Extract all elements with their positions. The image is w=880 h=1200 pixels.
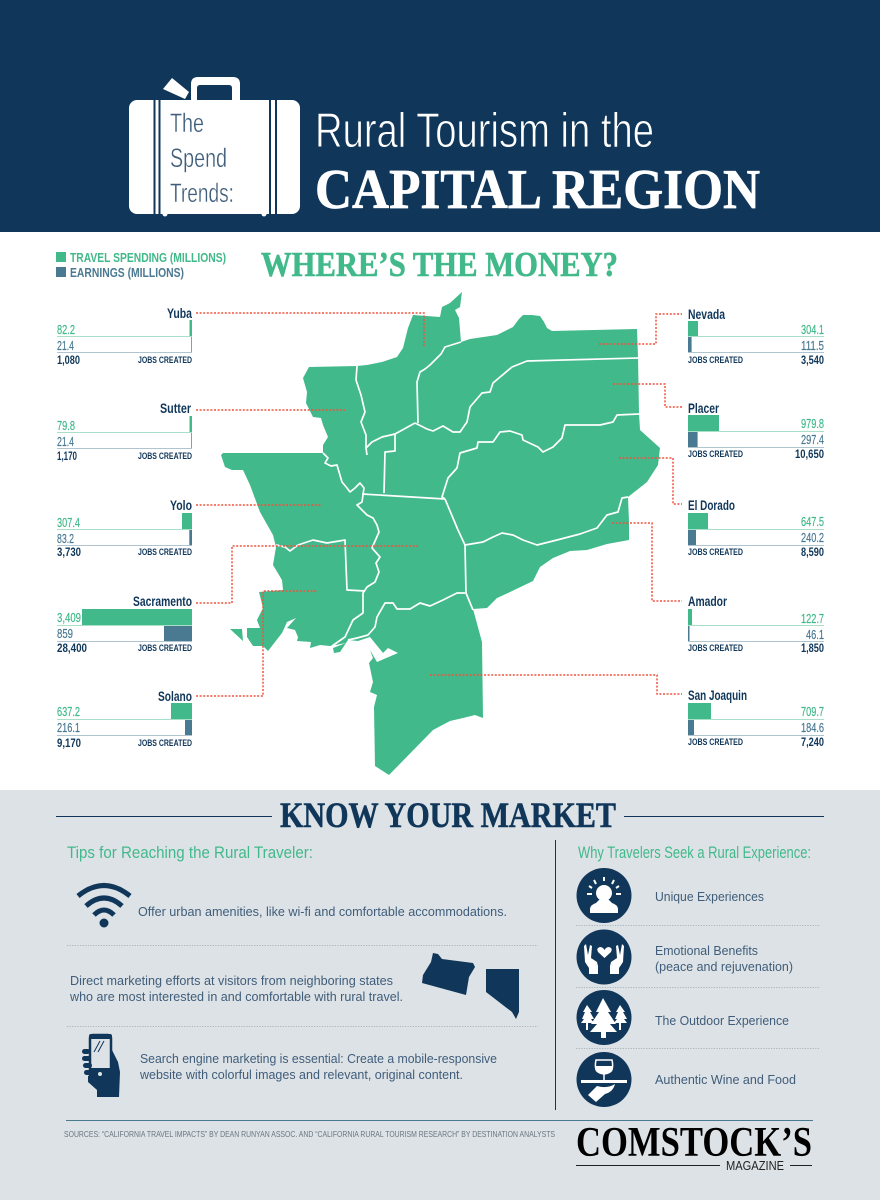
text: unique experiences: Unique Experiences <box>655 889 764 904</box>
panel: Yuba: JOBS CREATED <box>138 355 192 366</box>
suitcase text: Spend <box>170 143 227 173</box>
icon: wine and food tray <box>576 1052 632 1107</box>
panel: Nevada: Nevada <box>688 306 725 322</box>
panel: Yolo <box>57 497 192 559</box>
panel: San Joaquin: 184.6 <box>801 721 824 735</box>
heading: why travelers: Why Travelers Seek a Rural Experience: <box>578 843 811 862</box>
map of capital region counties <box>221 292 660 775</box>
suitcase text: The <box>170 108 204 138</box>
panel: San Joaquin: San Joaquin <box>688 687 747 703</box>
panel: San Joaquin <box>688 687 824 749</box>
panel: Solano: JOBS CREATED <box>138 738 192 749</box>
panel: San Joaquin: 7,240 <box>801 735 824 749</box>
tip text: search engine marketing: website with colorful images and relevant, original content. <box>139 1067 463 1082</box>
logo: Comstock's magazine: MAGAZINE <box>726 1159 784 1173</box>
tip text: neighboring states <box>69 973 403 1004</box>
panel: Sacramento: JOBS CREATED <box>138 643 192 654</box>
panel: Placer: JOBS CREATED <box>688 449 743 460</box>
panel: Placer: 979.8 <box>801 417 824 431</box>
panel: Amador <box>688 593 824 655</box>
tip text: urban amenities: Offer urban amenities, like wi-fi and comfortable accommodations. <box>138 904 507 919</box>
panel: El Dorado: El Dorado <box>688 497 735 513</box>
panel: Yuba: 1,080 <box>57 353 80 367</box>
panel: Sacramento: 3,409 <box>57 611 81 625</box>
panel: El Dorado: 647.5 <box>801 515 824 529</box>
panel: Yolo: 307.4 <box>57 516 80 530</box>
panel: Solano: 637.2 <box>57 705 80 719</box>
panel: Nevada: 304.1 <box>801 323 824 337</box>
heading: where's the money: WHERE’S THE MONEY? <box>261 245 618 284</box>
panel: Sacramento: 859 <box>57 627 73 641</box>
icon: wifi <box>78 886 130 928</box>
panel: Sutter: 79.8 <box>57 419 75 433</box>
icon: Oregon and Nevada <box>422 953 519 1019</box>
panel: Sutter: JOBS CREATED <box>138 451 192 462</box>
icon: suitcase with tag <box>129 77 300 216</box>
legend: TRAVEL SPENDING (MILLIONS) <box>70 251 226 265</box>
panel: Solano: 216.1 <box>57 721 80 735</box>
panel: Yolo: 3,730 <box>57 545 81 559</box>
panel: Nevada: 111.5 <box>801 339 824 353</box>
panel: Yolo: Yolo <box>170 497 192 513</box>
panel: Amador: Amador <box>688 593 727 609</box>
panel: Solano: 9,170 <box>57 736 81 750</box>
panel: El Dorado: 8,590 <box>801 545 824 559</box>
panel: Sacramento: 28,400 <box>57 641 87 655</box>
logo: Comstock's magazine: COMSTOCK’S <box>576 1120 812 1166</box>
panel: San Joaquin: 709.7 <box>801 705 824 719</box>
panel: Amador: JOBS CREATED <box>688 643 743 654</box>
icon: unique experiences <box>576 868 632 923</box>
panel: Sutter <box>57 400 192 463</box>
panel: El Dorado: 240.2 <box>801 531 824 545</box>
text: emotional benefits: Emotional Benefits <box>655 943 758 958</box>
title line one: Rural Tourism in the <box>315 104 654 158</box>
panel: Nevada: 3,540 <box>801 353 824 367</box>
panel: Yuba <box>57 305 192 367</box>
panel: Yuba: 21.4 <box>57 339 74 353</box>
panel: Sutter: Sutter <box>160 400 191 416</box>
panel: Nevada: JOBS CREATED <box>688 355 743 366</box>
panel: Yuba: Yuba <box>167 305 192 321</box>
tip text: search engine marketing <box>139 1051 497 1082</box>
panel: El Dorado: JOBS CREATED <box>688 547 743 558</box>
panel: Placer: 297.4 <box>801 433 824 447</box>
tip text: neighboring states: who are most interested in and comfortable with rural travel. <box>69 989 403 1004</box>
suitcase text <box>170 108 234 208</box>
text: emotional benefits <box>655 943 793 974</box>
heading: know your market: KNOW YOUR MARKET <box>280 795 616 835</box>
icon: outdoor trees <box>576 990 632 1045</box>
title line two: CAPITAL REGION <box>315 159 760 221</box>
panel: Sutter: 1,170 <box>57 449 77 463</box>
panel: San Joaquin: JOBS CREATED <box>688 737 743 748</box>
header banner <box>0 0 880 232</box>
panel: Solano <box>57 688 192 750</box>
panel: Sutter: 21.4 <box>57 435 74 449</box>
panel: Yolo: JOBS CREATED <box>138 547 192 558</box>
tip text: neighboring states: Direct marketing efforts at visitors from neighboring states <box>70 973 393 988</box>
icon: hand holding phone <box>82 1034 120 1097</box>
panel: Sacramento <box>57 593 192 655</box>
panel: Yuba: 82.2 <box>57 323 75 337</box>
suitcase text: Trends: <box>170 178 234 208</box>
text: wine and food: Authentic Wine and Food <box>655 1072 796 1087</box>
panel: El Dorado <box>688 497 824 559</box>
panel: Placer: 10,650 <box>795 447 824 461</box>
leader lines <box>196 313 682 696</box>
panel: Sacramento: Sacramento <box>133 593 192 609</box>
footer rule <box>66 1120 813 1122</box>
text: emotional benefits: (peace and rejuvenation) <box>655 959 793 974</box>
icon: emotional benefits <box>576 930 632 984</box>
tip text: search engine marketing: Search engine marketing is essential: Create a mobile-responsive <box>140 1051 497 1066</box>
panel: Solano: Solano <box>158 688 192 704</box>
panel: Amador: 46.1 <box>806 628 824 642</box>
panel: Yolo: 83.2 <box>57 532 74 546</box>
sources: SOURCES: “CALIFORNIA TRAVEL IMPACTS” BY DEAN RUNYAN ASSOC. AND “CALIFORNIA RURAL TOURISM RESEARCH” BY DESTINATION ANALYSTS <box>64 1129 555 1139</box>
panel: Amador: 1,850 <box>801 641 824 655</box>
panel: Amador: 122.7 <box>801 612 824 626</box>
panel: know your market <box>0 790 880 1200</box>
legend <box>56 251 226 280</box>
heading: tips: Tips for Reaching the Rural Traveler: <box>67 843 313 862</box>
panel: Placer: Placer <box>688 400 719 416</box>
legend: EARNINGS (MILLIONS) <box>70 266 184 280</box>
panel: Placer <box>688 400 824 461</box>
panel: Nevada <box>688 306 824 367</box>
text: outdoor experience: The Outdoor Experience <box>655 1013 789 1028</box>
